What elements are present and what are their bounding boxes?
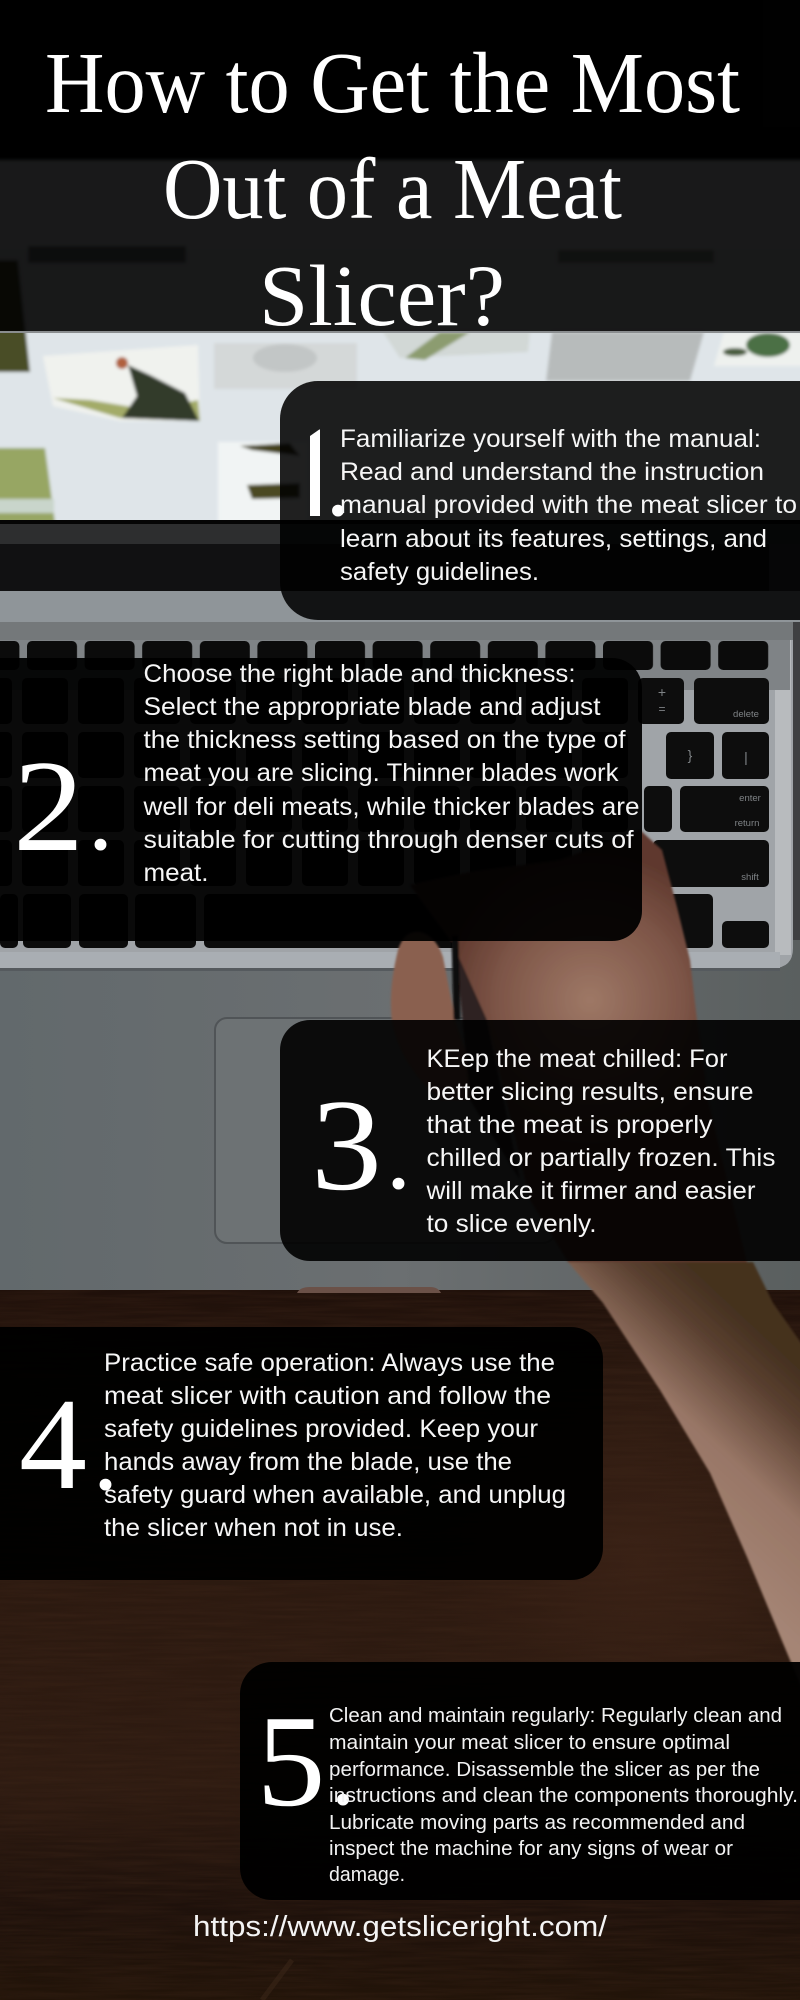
number 3: . — [386, 1099, 411, 1210]
title: How to Get the Most — [45, 34, 740, 131]
text: step 3: chilled or partially frozen. This — [426, 1144, 776, 1172]
text: step 1 — [340, 425, 797, 586]
wooden desk — [0, 1287, 800, 2000]
number 4: . — [93, 1400, 118, 1511]
panel: step 5 — [240, 1662, 800, 1900]
panel: step 4 — [0, 1327, 603, 1580]
number 1: 1 — [282, 400, 348, 545]
laptop body and keyboard: shift — [741, 872, 759, 883]
text: step 1: learn about its features, settings, and — [340, 525, 767, 553]
title: Slicer? — [259, 247, 505, 344]
number 1: . — [326, 426, 350, 537]
text: step 1: Read and understand the instruction — [340, 458, 764, 486]
text: step 2 — [142, 660, 640, 887]
text: step 3: will make it firmer and easier — [425, 1177, 756, 1205]
text: step 2: Select the appropriate blade and adjust — [144, 693, 601, 721]
text: step 3: that the meat is properly — [426, 1111, 713, 1139]
text: step 4 — [104, 1349, 566, 1542]
text: step 4: the slicer when not in use. — [104, 1514, 403, 1542]
text: step 5: Lubricate moving parts as recommended and — [329, 1811, 745, 1834]
laptop body and keyboard: | — [744, 749, 748, 765]
text: step 4: safety guidelines provided. Keep your — [104, 1415, 538, 1443]
text: step 5: instructions and clean the components thoroughly. — [329, 1784, 798, 1807]
number 1 — [310, 430, 344, 516]
laptop screen — [0, 160, 800, 532]
number 4: 4 — [19, 1372, 87, 1517]
number 3 — [311, 1073, 411, 1218]
text: step 2: the thickness setting based on the type of — [144, 726, 626, 754]
number 5: 5 — [256, 1689, 326, 1834]
text: step 5 — [329, 1704, 798, 1886]
laptop body and keyboard: return — [735, 818, 759, 829]
text: step 2: Choose the right blade and thickness: — [144, 660, 576, 688]
panel: step 1 — [280, 381, 800, 620]
text: step 4: meat slicer with caution and follow the — [104, 1382, 551, 1410]
website url: https://www.getsliceright.com/ — [193, 1911, 608, 1943]
laptop body and keyboard: } — [688, 747, 693, 763]
text: step 5: maintain your meat slicer to ensure optimal — [329, 1731, 730, 1754]
panel: step 2 — [0, 658, 642, 941]
number 5 — [256, 1689, 356, 1834]
text: step 2: well for deli meats, while thicker blades are — [142, 793, 640, 821]
number 2: 2 — [13, 734, 84, 879]
number 4 — [19, 1372, 118, 1517]
text: step 5: performance. Disassemble the slicer as per the — [329, 1758, 760, 1781]
text: step 3: better slicing results, ensure — [426, 1078, 754, 1106]
text: step 2: meat you are slicing. Thinner blades work — [144, 759, 619, 787]
number 2: . — [88, 760, 113, 871]
number 5: . — [330, 1715, 356, 1826]
text: step 2: suitable for cutting through denser cuts of — [144, 826, 634, 854]
text: step 4: Practice safe operation: Always use the — [104, 1349, 555, 1377]
hand and arm — [391, 830, 800, 1730]
text: step 4: safety guard when available, and unplug — [104, 1481, 566, 1509]
laptop body and keyboard — [0, 591, 800, 971]
text: step 2: meat. — [144, 859, 208, 887]
laptop body and keyboard: enter — [739, 793, 761, 804]
palm rest and touchpad — [0, 930, 800, 1290]
header panel — [0, 0, 800, 333]
title: Out of a Meat — [163, 140, 622, 237]
laptop body and keyboard: + — [658, 684, 666, 700]
text: step 4: hands away from the blade, use the — [104, 1448, 512, 1476]
number 3: 3 — [311, 1073, 382, 1218]
text: step 5: damage. — [329, 1863, 405, 1886]
laptop bezel — [0, 520, 800, 591]
text: step 3 — [425, 1045, 776, 1238]
number 2 — [13, 734, 113, 879]
text: step 3: to slice evenly. — [426, 1210, 596, 1238]
title — [45, 34, 740, 344]
text: step 5: Clean and maintain regularly: Regularly clean and — [329, 1704, 782, 1727]
text: step 1: safety guidelines. — [340, 558, 539, 586]
laptop body and keyboard: delete — [733, 709, 759, 720]
text: step 1: manual provided with the meat slicer to — [340, 491, 797, 519]
text: step 3: KEep the meat chilled: For — [426, 1045, 728, 1073]
text: step 1: Familiarize yourself with the manual: — [340, 425, 761, 453]
text: step 5: inspect the machine for any signs of wear or — [329, 1837, 733, 1860]
panel: step 3 — [280, 1020, 800, 1261]
laptop body and keyboard: = — [658, 702, 666, 716]
